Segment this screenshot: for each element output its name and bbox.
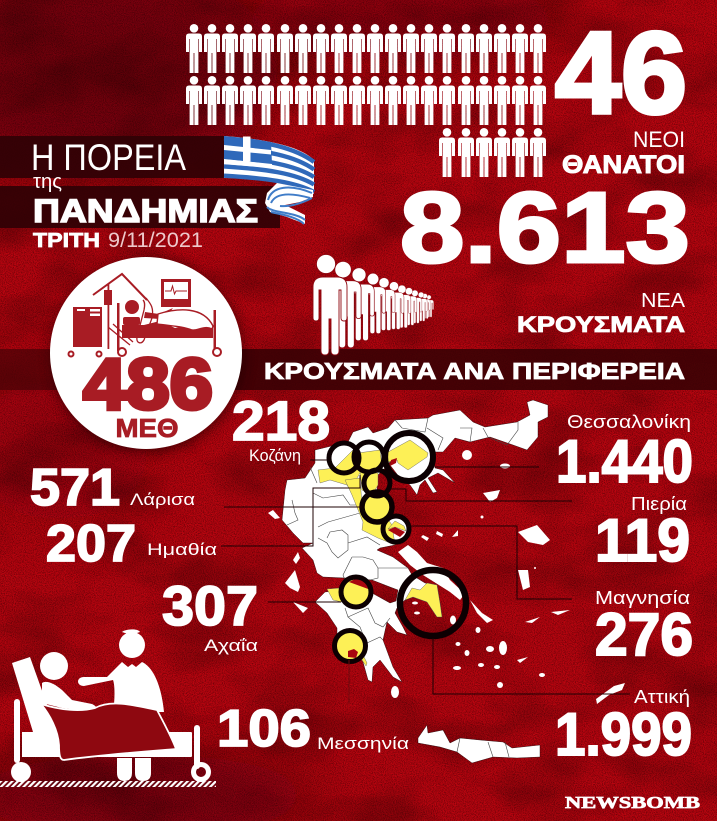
label: Attica: Αττική [634,687,690,707]
stat: new cases: ΝΕΑ [641,290,686,312]
label: Magnesia: Μαγνησία [595,588,690,608]
icon: queue of people [313,254,434,355]
map: Evia [398,545,463,600]
map: highlighted regions [318,440,442,666]
title block: ΤΡΙΤΗ [33,230,100,252]
label: Thessaloniki: 1.440 [556,428,693,495]
title block: Η ΠΟΡΕΙΑ [31,137,186,178]
label: Messinia: Μεσσηνία [317,734,409,753]
label: Achaia: 307 [162,574,258,637]
logo: Newsbomb: NEWSBOMB [565,793,700,812]
label: Kozani: Κοζάνη [249,446,301,465]
label: Attica: 1.999 [555,701,692,768]
label: Messinia: 106 [217,700,311,758]
label: Kozani: 218 [232,389,330,452]
label: Larisa: 571 [30,459,120,517]
stat: new deaths: ΘΑΝΑΤΟΙ [562,151,685,179]
map: leader lines [221,460,630,703]
label: Imathia: 207 [46,515,136,573]
icon: ICU bed and monitors [68,274,221,356]
map of Greece [221,400,630,763]
panel: ICU badge: ΜΕΘ [116,413,178,443]
heading: cases per region: ΚΡΟΥΣΜΑΤΑ ΑΝΑ ΠΕΡΙΦΕΡΕΙΑ [264,358,685,384]
title block: 9/11/2021 [108,229,203,252]
panel: ICU badge: 486 [83,345,213,425]
map: islands [268,450,625,704]
title block: ΠΑΝΔΗΜΙΑΣ [33,193,258,229]
label: Imathia: Ημαθία [147,540,217,559]
label: Pieria: 119 [595,507,690,574]
map: mainland and Peloponnese [282,400,548,682]
label: Achaia: Αχαΐα [204,636,258,655]
icon: blanket [41,704,176,760]
icon: patient and doctor [0,629,216,787]
label: Thessaloniki: Θεσσαλονίκη [567,412,691,432]
map: region circles [329,433,466,662]
label: Larisa: Λάρισα [130,490,195,509]
map: regional borders [287,418,518,757]
title block [0,136,280,252]
label: Messinia [217,700,409,758]
map: water cut-outs in circles [348,458,405,658]
label: Pieria: Πιερία [631,494,687,514]
icon: Greek flag ribbon [224,136,314,224]
title block: της [33,171,62,193]
stat: new cases: ΚΡΟΥΣΜΑΤΑ [517,312,685,337]
label: Imathia [46,515,217,573]
label: Larisa [30,459,195,517]
stat: new deaths: 46 [555,8,687,138]
stat: new cases [400,172,690,337]
stat: new cases: 8.613 [400,172,690,284]
label: Magnesia: 276 [595,601,693,668]
icon: grid of deaths figures [186,24,546,177]
band: regional cases heading background [0,349,717,390]
stat: new deaths: ΝΕΟΙ [633,127,685,152]
map: Crete [418,725,540,763]
panel: ICU badge [50,257,245,453]
